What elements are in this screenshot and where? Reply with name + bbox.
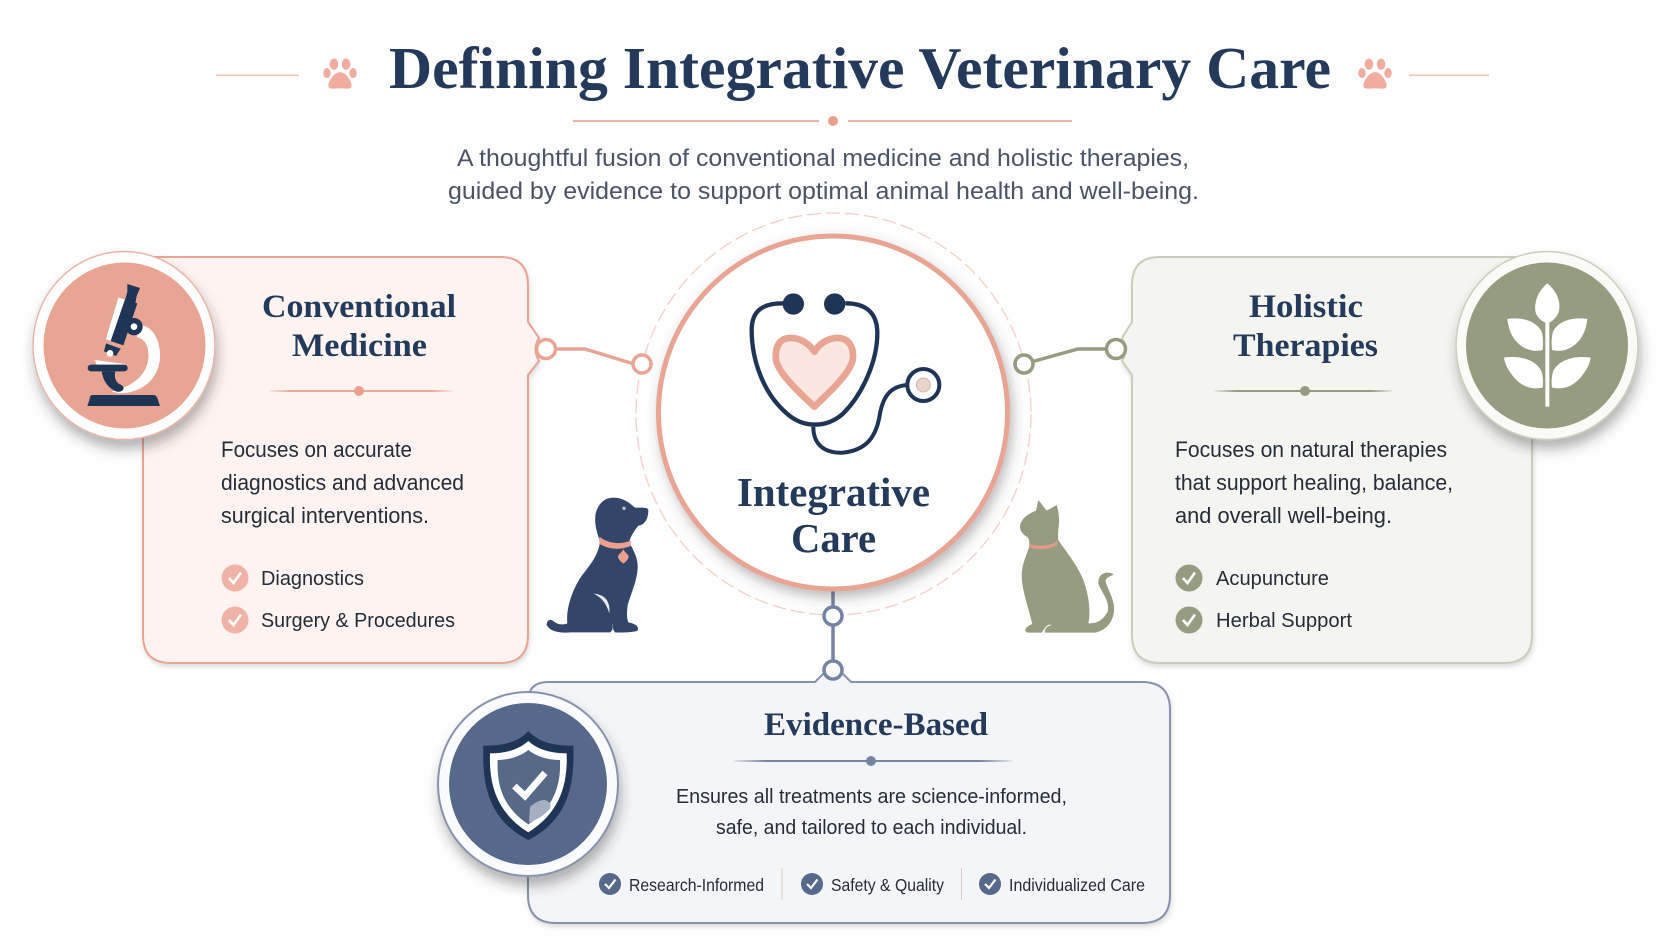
panel: evidence-based (528, 607, 1170, 923)
icon: left paw (323, 59, 357, 89)
center label (737, 469, 930, 561)
panel card (528, 671, 1170, 923)
icon: microscope (87, 284, 160, 406)
badge: plant (1456, 252, 1638, 440)
list item: acupuncture (1176, 564, 1329, 592)
body text (676, 786, 1067, 839)
body text: Ensures all treatments are science-informed, (676, 786, 1067, 808)
list item: diagnostics: Diagnostics (261, 567, 364, 590)
panel: conventional medicine (143, 257, 556, 663)
heading: Evidence-Based (764, 707, 988, 743)
heading: Medicine (292, 328, 427, 364)
center label: Integrative (737, 469, 930, 515)
icon: plant (1504, 283, 1591, 407)
body text: diagnostics and advanced (221, 470, 464, 495)
body text (221, 437, 464, 528)
center label: Care (791, 515, 876, 561)
connector nodes (824, 607, 842, 679)
subtitle: guided by evidence to support optimal animal health and well-being. (448, 178, 1199, 205)
subtitle: A thoughtful fusion of conventional medicine and holistic therapies, (457, 145, 1189, 172)
body text (1175, 437, 1453, 528)
body text: and overall well-being. (1175, 503, 1392, 528)
list item: surgery: Surgery & Procedures (261, 609, 455, 632)
list item: diagnostics (222, 564, 364, 592)
item: individualized care: Individualized Care (1009, 875, 1145, 895)
connector node (1106, 340, 1126, 358)
icon: cat (1020, 500, 1114, 633)
connector: bottom (831, 590, 835, 660)
badge: microscope (33, 252, 215, 440)
heading: Holistic (1249, 289, 1363, 325)
center dashed ring (636, 213, 1031, 615)
body text: Focuses on accurate (221, 437, 412, 462)
icon: shield (483, 731, 573, 840)
heading (1233, 289, 1378, 364)
connector: left (552, 349, 651, 373)
connector: right (1015, 349, 1108, 373)
center circle: integrative care (658, 236, 1008, 589)
list item: surgery (222, 606, 455, 634)
item: research-informed: Research-Informed (629, 875, 764, 895)
header (216, 35, 1489, 205)
list item: acupuncture: Acupuncture (1216, 567, 1329, 590)
body text: safe, and tailored to each individual. (716, 817, 1027, 839)
item: research-informed (599, 873, 764, 895)
list item: herbal support: Herbal Support (1216, 609, 1352, 632)
heading: Conventional (262, 289, 456, 325)
panel card (143, 257, 539, 663)
body text: Focuses on natural therapies (1175, 437, 1447, 462)
badge: shield (438, 692, 618, 876)
body text: that support healing, balance, (1175, 470, 1453, 495)
connector node (536, 340, 556, 358)
panel: holistic therapies (1106, 257, 1532, 663)
list item: herbal support (1176, 606, 1352, 634)
icon: right paw (1358, 59, 1392, 89)
panel card (1122, 257, 1532, 663)
heading: Therapies (1233, 328, 1378, 364)
item: individualized care (979, 873, 1145, 895)
title: Defining Integrative Veterinary Care (389, 35, 1331, 101)
body text: surgical interventions. (221, 503, 429, 528)
subtitle (448, 145, 1199, 205)
heading (262, 289, 456, 364)
icon: stethoscope and heart (752, 293, 939, 453)
item: safety and quality (801, 873, 944, 895)
icon: dog (547, 498, 648, 633)
item: safety and quality: Safety & Quality (831, 875, 944, 895)
